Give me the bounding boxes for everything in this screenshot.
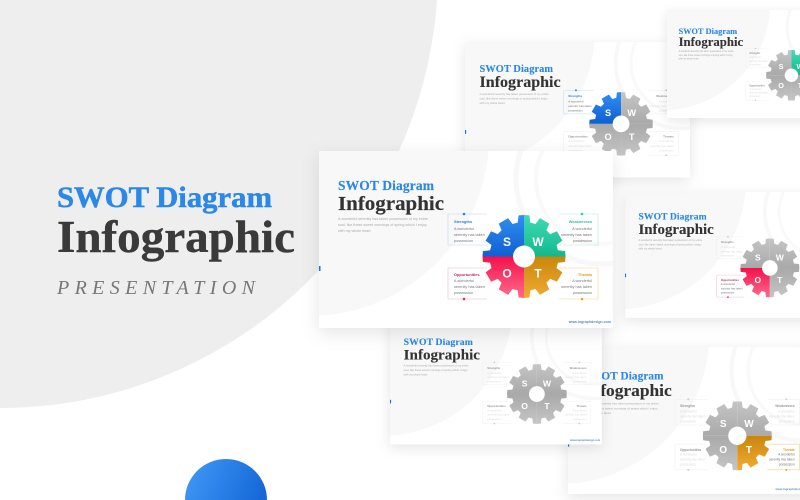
slide: main full colour: Opportunities <box>454 272 480 277</box>
slide: strengths highlighted, top centre: A wonderful <box>659 139 674 143</box>
slide: main full colour: A wonderful <box>454 279 474 283</box>
gear: opportunities highlighted: S <box>755 253 761 263</box>
slide: main full colour: A wonderful <box>572 227 592 231</box>
slide: strengths highlighted, top centre: A wonderful <box>568 99 584 103</box>
slide: weaknesses highlighted, top right: A wonderful serenity has taken possession of my entire <box>679 50 734 53</box>
slide: weaknesses highlighted, top right: Opportunities <box>749 84 766 87</box>
slide: no highlight, bottom left: Weaknesses <box>570 366 587 370</box>
slide: strengths highlighted, top centre: possession <box>659 109 674 113</box>
slide: threats highlighted, bottom right: Weaknesses <box>775 404 795 408</box>
slide: weaknesses highlighted, top right: Infographic <box>679 35 744 49</box>
slide: main full colour: Weaknesses <box>569 219 592 224</box>
slide: weaknesses highlighted, top right: soul, like these sweet mornings of spring which I enjoy <box>679 54 734 57</box>
gear: all grey: S <box>522 378 528 388</box>
slide: opportunities highlighted, right: A wonderful <box>721 282 735 286</box>
slide: weaknesses highlighted, top right: possession <box>749 65 762 67</box>
slide: no highlight, bottom left: www.ingraphdesign.com <box>570 438 601 442</box>
slide: weaknesses highlighted, top right: A wonderful <box>749 56 762 59</box>
slide: main full colour: Infographic <box>338 193 444 215</box>
slide: no highlight, bottom left: serenity has taken <box>487 375 510 379</box>
slide: opportunities highlighted, right: Strengths <box>721 240 734 244</box>
slide: weaknesses highlighted, top right: with my whole heart. <box>679 57 699 60</box>
slide: opportunities highlighted, right: Opportunities <box>721 278 739 282</box>
slide: strengths highlighted, top centre: serenity has taken <box>568 104 592 108</box>
gear: opportunities highlighted: W <box>776 253 785 263</box>
slide: threats highlighted, bottom right: possession <box>680 420 696 424</box>
slide: strengths highlighted, top centre <box>462 49 693 184</box>
hero subheading: Presentation: PRESENTATION <box>56 277 257 299</box>
slide: main full colour: Threats <box>578 272 592 277</box>
slide: threats highlighted, bottom right: A wonderful <box>680 453 697 457</box>
gear: weaknesses highlighted <box>766 50 800 101</box>
slide: no highlight, bottom left: serenity has taken <box>487 413 510 417</box>
gear: full colour SWOT: T <box>534 266 542 280</box>
gear: weaknesses highlighted: S <box>779 62 784 71</box>
slide: opportunities highlighted, right: serenity has taken <box>721 286 743 290</box>
slide: opportunities highlighted, right: Infographic <box>638 222 714 238</box>
slide: main full colour: with my whole heart. <box>338 229 372 233</box>
slide: opportunities highlighted, right: serenity has taken <box>721 249 743 253</box>
gear: weaknesses highlighted: O <box>778 81 784 90</box>
slide: weaknesses highlighted, top right: A wonderful <box>749 88 762 91</box>
gear: all grey: T <box>544 401 550 411</box>
slide: strengths highlighted, top centre: Strengths <box>568 94 582 98</box>
gear: all grey <box>507 364 567 424</box>
slide: opportunities highlighted, right: A wonderful <box>721 245 735 249</box>
slide: no highlight, bottom left: A wonderful <box>572 408 587 412</box>
slide: no highlight, bottom left: serenity has taken <box>564 375 587 379</box>
gear: threats highlighted: O <box>719 445 727 456</box>
slide: threats highlighted, bottom right: A wonderful <box>680 410 697 414</box>
gear: full colour SWOT: O <box>502 266 512 280</box>
slide: strengths highlighted, top centre: soul, like these sweet mornings of spring which I enjoy <box>480 96 548 100</box>
slide: weaknesses highlighted, top right: SWOT Diagram <box>679 27 737 36</box>
slide: no highlight, bottom left: soul, like these sweet mornings of spring which I enjoy <box>404 368 468 372</box>
slide: main full colour: SWOT Diagram <box>338 178 435 193</box>
slide: opportunities highlighted, right <box>622 198 800 324</box>
slide: threats highlighted, bottom right: serenity has taken <box>769 415 795 419</box>
gear: all grey: W <box>543 378 552 388</box>
slide: main full colour: possession <box>573 291 592 295</box>
gear: strengths highlighted <box>589 92 653 156</box>
slide: main full colour: serenity has taken <box>561 285 592 289</box>
slide: strengths highlighted, top centre: Infographic <box>480 74 561 91</box>
slide: strengths highlighted, top centre: A wonderful serenity has taken possession of my entire <box>480 92 549 96</box>
slide: opportunities highlighted, right: A wonderful serenity has taken possession of my entire <box>638 238 703 242</box>
gear: full colour SWOT: S <box>503 235 511 249</box>
slide: main full colour <box>315 151 617 337</box>
slide: main full colour: www.ingraphdesign.com <box>568 320 611 324</box>
slide: opportunities highlighted, right: with my whole heart. <box>638 247 663 251</box>
slide: no highlight, bottom left: Opportunities <box>487 404 506 408</box>
hero heading: Infographic: Infographic <box>57 212 295 262</box>
slide: no highlight, bottom left: possession <box>487 417 501 421</box>
slide: opportunities highlighted, right: soul, like these sweet mornings of spring which I enjoy <box>638 242 702 246</box>
slide: strengths highlighted, top centre: A wonderful <box>659 99 674 103</box>
slide: main full colour: A wonderful <box>454 227 474 231</box>
gear: threats highlighted <box>703 401 772 470</box>
slide: strengths highlighted, top centre: possession <box>568 109 583 113</box>
hero heading: SWOT Diagram: SWOT Diagram <box>57 181 272 214</box>
slide: strengths highlighted, top centre: Threats <box>663 135 674 139</box>
slide: no highlight, bottom left: A wonderful <box>572 371 587 375</box>
background grey circle <box>0 0 438 408</box>
gear: strengths highlighted: O <box>604 132 612 142</box>
slide: strengths highlighted, top centre: possession <box>568 148 583 152</box>
slide: main full colour: possession <box>454 291 473 295</box>
slide: no highlight, bottom left <box>387 328 604 451</box>
gear: strengths highlighted: T <box>629 132 635 142</box>
slide: threats highlighted, bottom right: with my whole heart. <box>584 411 612 415</box>
slide: threats highlighted, bottom right: A wonderful <box>778 410 795 414</box>
slide: strengths highlighted, top centre: possession <box>659 148 674 152</box>
slide: main full colour: serenity has taken <box>454 285 485 289</box>
slide: strengths highlighted, top centre: Opportunities <box>568 135 588 139</box>
gear: strengths highlighted: W <box>627 108 636 118</box>
slide: threats highlighted, bottom right: serenity has taken <box>680 458 706 462</box>
slide: threats highlighted, bottom right: Opportunities <box>680 448 701 452</box>
slide: strengths highlighted, top centre: serenity has taken <box>650 104 674 108</box>
slide: no highlight, bottom left: with my whole heart. <box>404 372 428 376</box>
slide: weaknesses highlighted, top right <box>664 16 800 124</box>
slide: threats highlighted, bottom right: possession <box>779 463 795 467</box>
slide: threats highlighted, bottom right: possession <box>680 463 696 467</box>
slide: threats highlighted, bottom right: Strengths <box>680 404 695 408</box>
gear: full colour SWOT <box>482 215 566 298</box>
slide: main full colour: serenity has taken <box>454 233 485 237</box>
slide: main full colour: A wonderful serenity has taken possession of my entire <box>338 217 428 221</box>
slide: opportunities highlighted, right: possession <box>721 254 735 258</box>
slide: no highlight, bottom left: serenity has taken <box>564 413 587 417</box>
slide: main full colour: serenity has taken <box>561 233 592 237</box>
slide: threats highlighted, bottom right: possession <box>779 420 795 424</box>
slide: threats highlighted, bottom right: A wonderful <box>778 453 795 457</box>
slide: weaknesses highlighted, top right: Strengths <box>749 52 761 55</box>
slide: main full colour: A wonderful <box>572 279 592 283</box>
slide: strengths highlighted, top centre: A wonderful <box>568 139 584 143</box>
gear: threats highlighted: S <box>720 419 727 430</box>
gear: threats highlighted: T <box>746 445 752 456</box>
slide: no highlight, bottom left: possession <box>573 380 587 384</box>
gear: threats highlighted: W <box>744 419 754 430</box>
gear: strengths highlighted: S <box>605 108 611 118</box>
gear: opportunities highlighted <box>740 239 799 297</box>
slide: main full colour: possession <box>454 239 473 243</box>
gear: full colour SWOT: W <box>532 235 544 249</box>
slide: no highlight, bottom left: possession <box>487 380 501 384</box>
slide: threats highlighted, bottom right: serenity has taken <box>769 458 795 462</box>
slide: threats highlighted, bottom right: Threats <box>783 448 795 452</box>
slide: no highlight, bottom left: SWOT Diagram <box>404 337 473 348</box>
slide: opportunities highlighted, right: possession <box>721 291 735 295</box>
slide: strengths highlighted, top centre: SWOT Diagram <box>480 64 553 75</box>
slide: no highlight, bottom left: A wonderful <box>487 408 502 412</box>
slide: weaknesses highlighted, top right: serenity has taken <box>749 92 769 95</box>
slide: threats highlighted, bottom right: A wonderful serenity has taken possession of my entire <box>584 401 659 405</box>
slide: main full colour: possession <box>573 239 592 243</box>
slide: no highlight, bottom left: Infographic <box>404 347 481 363</box>
slide: main full colour: Strengths <box>454 219 472 224</box>
slide: main full colour: soul, like these sweet mornings of spring which I enjoy <box>338 223 427 227</box>
slide: opportunities highlighted, right: SWOT Diagram <box>638 212 707 223</box>
slide: threats highlighted, bottom right: serenity has taken <box>680 415 706 419</box>
slide: strengths highlighted, top centre: serenity has taken <box>568 144 592 148</box>
gear: all grey: O <box>521 401 528 411</box>
slide: strengths highlighted, top centre: with my whole heart. <box>480 101 506 105</box>
slide: no highlight, bottom left: A wonderful <box>487 371 502 375</box>
slide: strengths highlighted, top centre: serenity has taken <box>650 144 674 148</box>
slide: no highlight, bottom left: Threats <box>576 404 587 408</box>
slide: threats highlighted, bottom right: soul, like these sweet mornings of spring which I enjoy <box>584 406 658 410</box>
slide: no highlight, bottom left: Strengths <box>487 366 501 370</box>
slide: no highlight, bottom left: possession <box>573 417 587 421</box>
slide: strengths highlighted, top centre: Weaknesses <box>656 94 674 98</box>
gear: opportunities highlighted: O <box>754 275 761 285</box>
slide: weaknesses highlighted, top right: possession <box>749 96 762 98</box>
slide: threats highlighted, bottom right <box>564 372 800 500</box>
slide: threats highlighted, bottom right: SWOT Diagram <box>584 370 664 382</box>
gear: opportunities highlighted: T <box>777 275 783 285</box>
slide: weaknesses highlighted, top right: serenity has taken <box>749 60 769 63</box>
slide: no highlight, bottom left: A wonderful serenity has taken possession of my entire <box>404 364 469 368</box>
slide: threats highlighted, bottom right: Infographic <box>584 381 672 400</box>
blue circle at bottom <box>185 459 267 500</box>
